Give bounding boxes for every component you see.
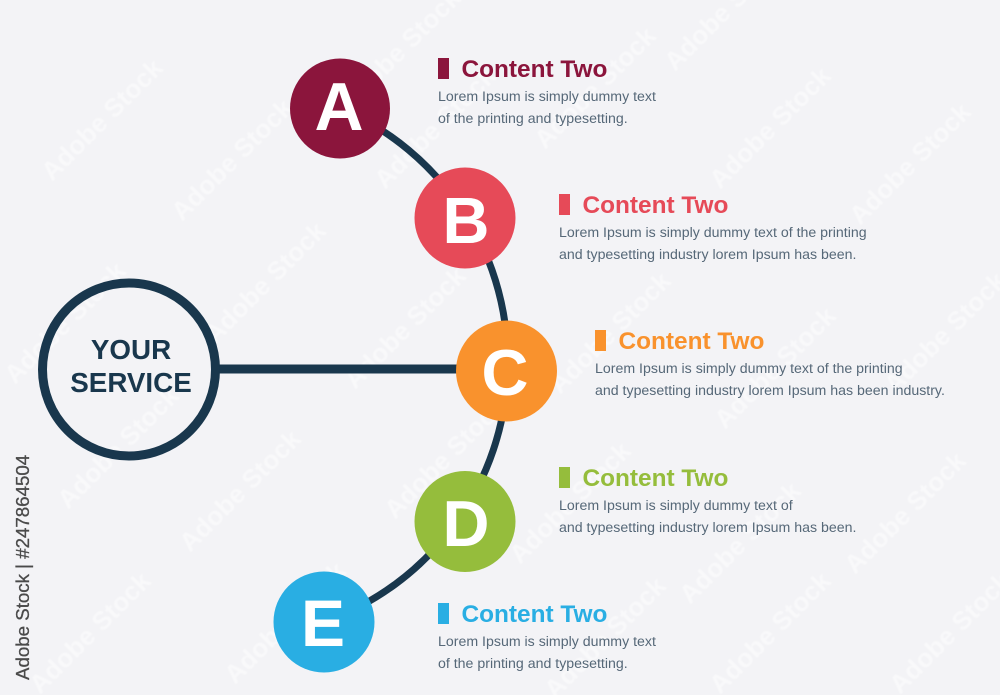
circle B [414, 168, 516, 268]
text: Adobe Stock [843, 96, 977, 230]
text: Adobe Stock [173, 423, 307, 557]
circle A: A [314, 69, 364, 145]
circle C: C [482, 336, 528, 409]
text: Adobe Stock [378, 390, 512, 524]
connector arc [324, 108, 508, 622]
circle C [456, 320, 557, 422]
text block D: Lorem Ipsum is simply dummy text of [559, 498, 793, 514]
circle E: E [301, 586, 345, 660]
text block A: Lorem Ipsum is simply dummy text [438, 88, 656, 104]
text block B: and typesetting industry lorem Ipsum has been. [559, 246, 856, 262]
circle B: B [443, 184, 489, 257]
heading A: Content Two [462, 56, 607, 83]
text block C: and typesetting industry lorem Ipsum has been industry. [595, 382, 945, 398]
text: Adobe Stock [338, 260, 472, 394]
connector line [215, 364, 460, 374]
text block E: of the printing and typesetting. [438, 656, 628, 672]
text block A [438, 56, 656, 126]
heading B: Content Two [582, 192, 728, 219]
text: Adobe Stock [838, 445, 972, 579]
text block C [595, 328, 945, 398]
heading C: Content Two [618, 328, 764, 355]
circle E [274, 572, 374, 672]
central circle: your service: YOUR [91, 334, 171, 365]
text: Adobe Stock [51, 380, 185, 514]
text block B [559, 192, 867, 262]
text: Adobe Stock [35, 52, 169, 186]
text block E: Lorem Ipsum is simply dummy text [438, 634, 656, 650]
circle A [290, 58, 390, 158]
text block D: and typesetting industry lorem Ipsum has been. [559, 520, 856, 536]
text: Adobe Stock [543, 265, 677, 399]
text block D [559, 465, 856, 536]
heading D: Content Two [582, 465, 728, 492]
text: Adobe Stock [708, 300, 842, 434]
text: Adobe Stock [218, 555, 352, 689]
heading E: Content Two [462, 601, 607, 628]
central circle: your service [42, 283, 216, 456]
circle D: D [443, 487, 489, 560]
central circle: your service: SERVICE [70, 367, 192, 398]
text: Adobe Stock [0, 255, 132, 389]
circle D [414, 471, 516, 572]
stock id side text: Adobe Stock | #247864504 [12, 455, 33, 680]
text: Adobe Stock [528, 20, 662, 154]
text: Adobe Stock [673, 475, 807, 609]
text: Adobe Stock [503, 435, 637, 569]
text block C: Lorem Ipsum is simply dummy text of the printing [595, 360, 903, 376]
text: Adobe Stock [368, 60, 502, 194]
text: Adobe Stock [703, 60, 837, 194]
text block B: Lorem Ipsum is simply dummy text of the printing [559, 224, 867, 240]
text block A: of the printing and typesetting. [438, 110, 628, 126]
text block E [438, 601, 656, 672]
text: Adobe Stock [165, 92, 299, 226]
text: Adobe Stock [198, 215, 332, 349]
